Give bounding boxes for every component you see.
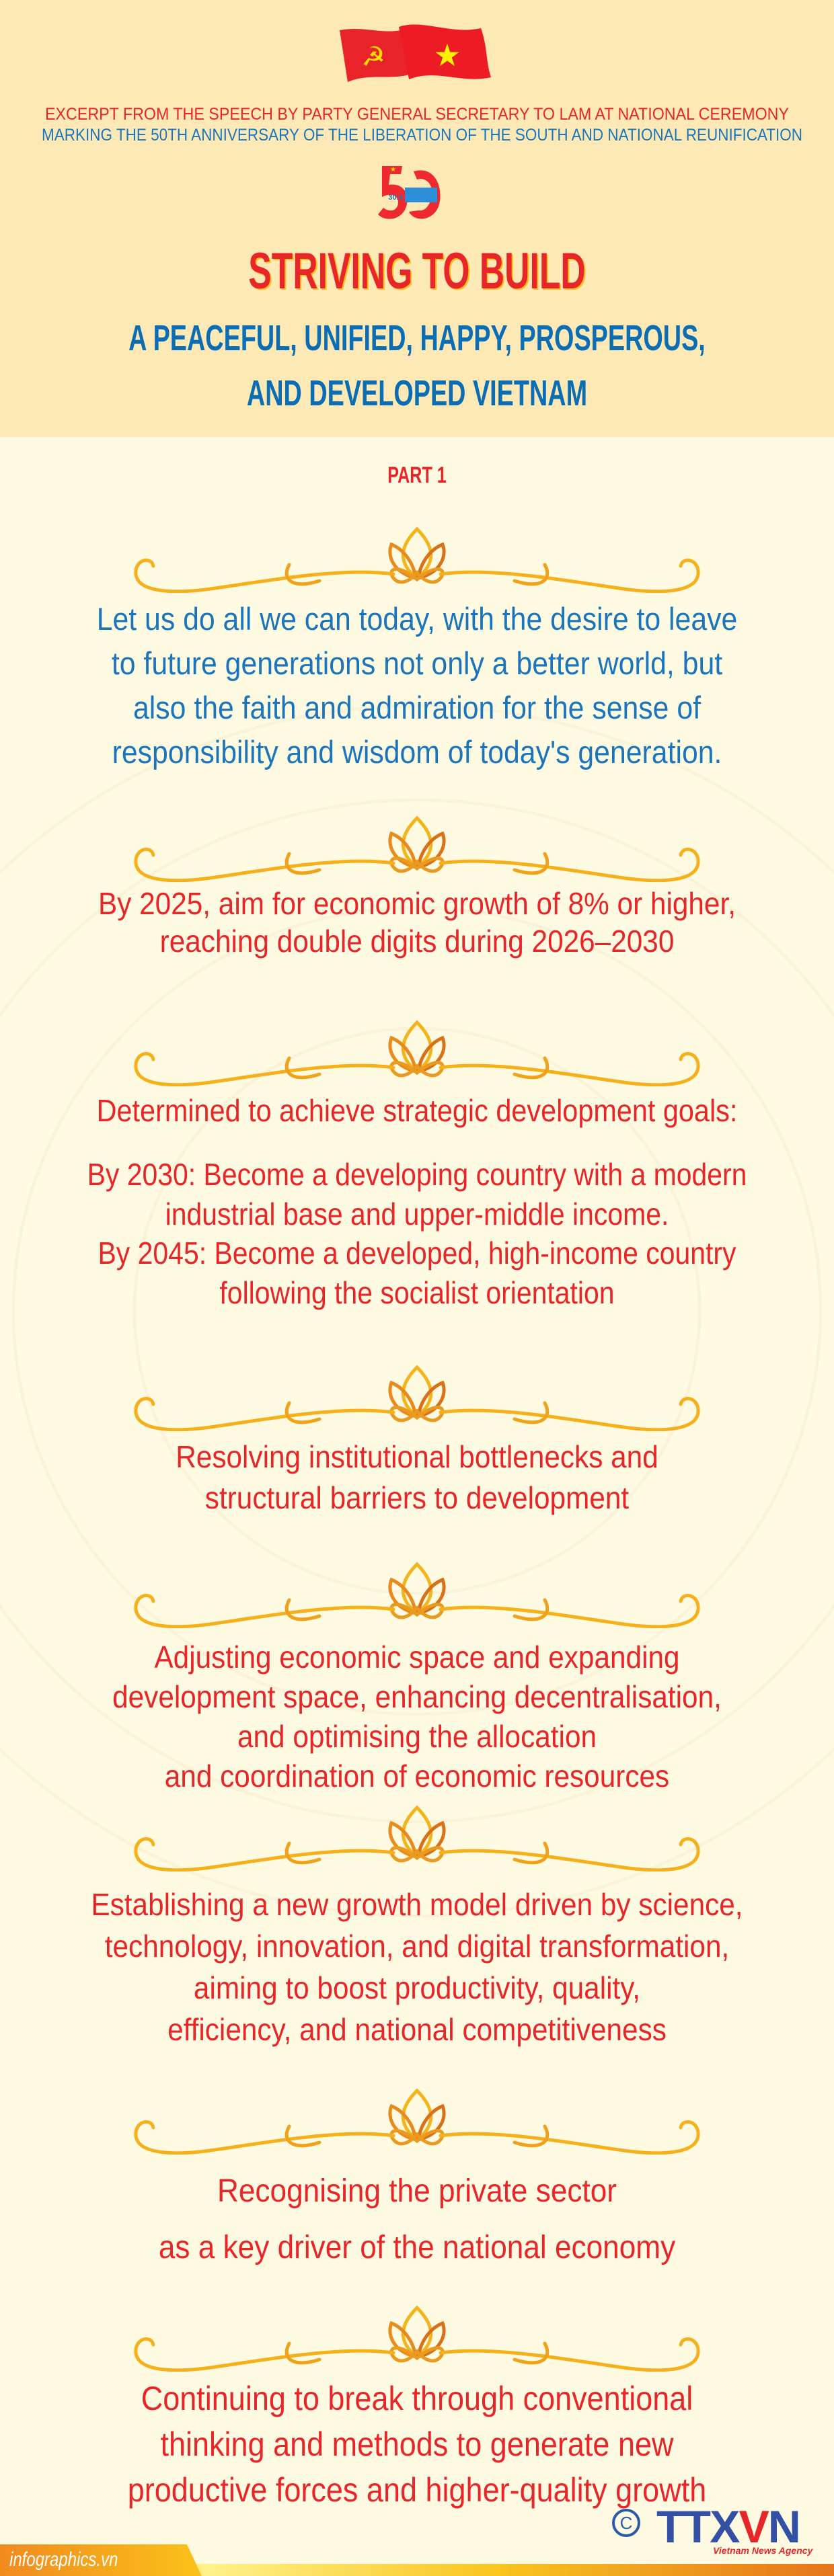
title: STRIVING TO BUILD (248, 243, 586, 300)
subtitle main: AND DEVELOPED VIETNAM (247, 373, 587, 413)
ornament 4 (134, 1365, 700, 1431)
ornament 8 (134, 2306, 700, 2372)
icon: flags: ★ (433, 37, 461, 73)
text: 2030 and 2045 goals: following the socialist orientation (219, 1275, 615, 1310)
ornament 5 (134, 1562, 700, 1628)
icon: 50 logo (378, 166, 441, 219)
text: private sector: as a key driver of the national economy (159, 2230, 675, 2265)
text: economic space: Adjusting economic space and expanding (154, 1640, 680, 1675)
subtitle marking: MARKING THE 50TH ANNIVERSARY OF THE LIBERATION OF THE SOUTH AND NATIONAL REUNIFICATION (42, 126, 802, 145)
subtitle main: A PEACEFUL, UNIFIED, HAPPY, PROSPEROUS, (128, 318, 706, 358)
ornament 1 (134, 527, 700, 593)
text: economic space: and coordination of economic resources (165, 1759, 669, 1794)
icon: 50 logo: 30.4 (388, 194, 404, 202)
text: economic space: and optimising the allocation (237, 1719, 597, 1754)
icon: flags: ☭ (361, 42, 385, 73)
text: private sector: Recognising the private sector (217, 2173, 617, 2209)
quote: to future generations not only a better world, but (112, 645, 722, 681)
ornament 2 (134, 816, 700, 882)
quote: also the faith and admiration for the sense of (133, 690, 701, 725)
text: institutional bottlenecks: structural barriers to development (205, 1480, 629, 1515)
text: growth model: efficiency, and national competitiveness (167, 2012, 667, 2047)
text: institutional bottlenecks: Resolving institutional bottlenecks and (176, 1439, 658, 1474)
text: economic space: development space, enhancing decentralisation, (112, 1679, 722, 1714)
footer: infographics.vn tab (0, 2544, 202, 2576)
logo: TTXVN: C (620, 2513, 632, 2533)
text: growth model (91, 1887, 743, 2047)
ornament 7 (134, 2088, 700, 2155)
icon: 50 logo: ★ (390, 166, 396, 173)
text: 2030 and 2045 goals: By 2045: Become a developed, high-income country (98, 1236, 736, 1271)
text: growth model: aiming to boost productivity, quality, (194, 1970, 640, 2005)
text: breakthrough thinking: Continuing to break through conventional (141, 2380, 693, 2417)
footer bar (0, 2564, 834, 2576)
text: breakthrough thinking: productive forces and higher-quality growth (128, 2471, 706, 2509)
text: breakthrough thinking: thinking and methods to generate new (160, 2425, 674, 2463)
logo: TTXVN (612, 2501, 813, 2556)
text: private sector (159, 2173, 675, 2265)
ornament 3 (134, 1020, 700, 1086)
text: 2030 and 2045 goals (87, 1157, 747, 1310)
text: growth model: Establishing a new growth model driven by science, (91, 1887, 743, 1922)
subtitle main (128, 318, 706, 413)
header band (0, 0, 834, 437)
text: growth target: By 2025, aim for economic growth of 8% or higher, (98, 886, 736, 921)
quote (97, 601, 737, 770)
text: breakthrough thinking (128, 2380, 706, 2509)
footer: infographics.vn tab: infographics.vn (9, 2548, 118, 2571)
text: 2030 and 2045 goals: industrial base and upper-middle income. (165, 1197, 669, 1232)
quote: responsibility and wisdom of today's generation. (112, 734, 722, 770)
part label: PART 1 (387, 462, 447, 488)
text: growth target: reaching double digits during 2026–2030 (160, 924, 674, 959)
ornament 6 (134, 1806, 700, 1871)
text: economic space (112, 1640, 722, 1794)
text: growth target (98, 886, 736, 959)
text: growth model: technology, innovation, and digital transformation, (105, 1929, 729, 1964)
subtitle excerpt: EXCERPT FROM THE SPEECH BY PARTY GENERAL SECRETARY TO LAM AT NATIONAL CEREMONY (45, 105, 789, 124)
quote: Let us do all we can today, with the desire to leave (97, 601, 737, 637)
logo: TTXVN: Vietnam News Agency (713, 2545, 812, 2556)
text: strategic goals heading: Determined to achieve strategic development goals: (97, 1093, 737, 1128)
text: institutional bottlenecks (176, 1439, 658, 1515)
icon: flags (340, 24, 491, 82)
text: 2030 and 2045 goals: By 2030: Become a developing country with a modern (87, 1157, 747, 1192)
logo: TTXVN: TTXVN (656, 2501, 800, 2552)
